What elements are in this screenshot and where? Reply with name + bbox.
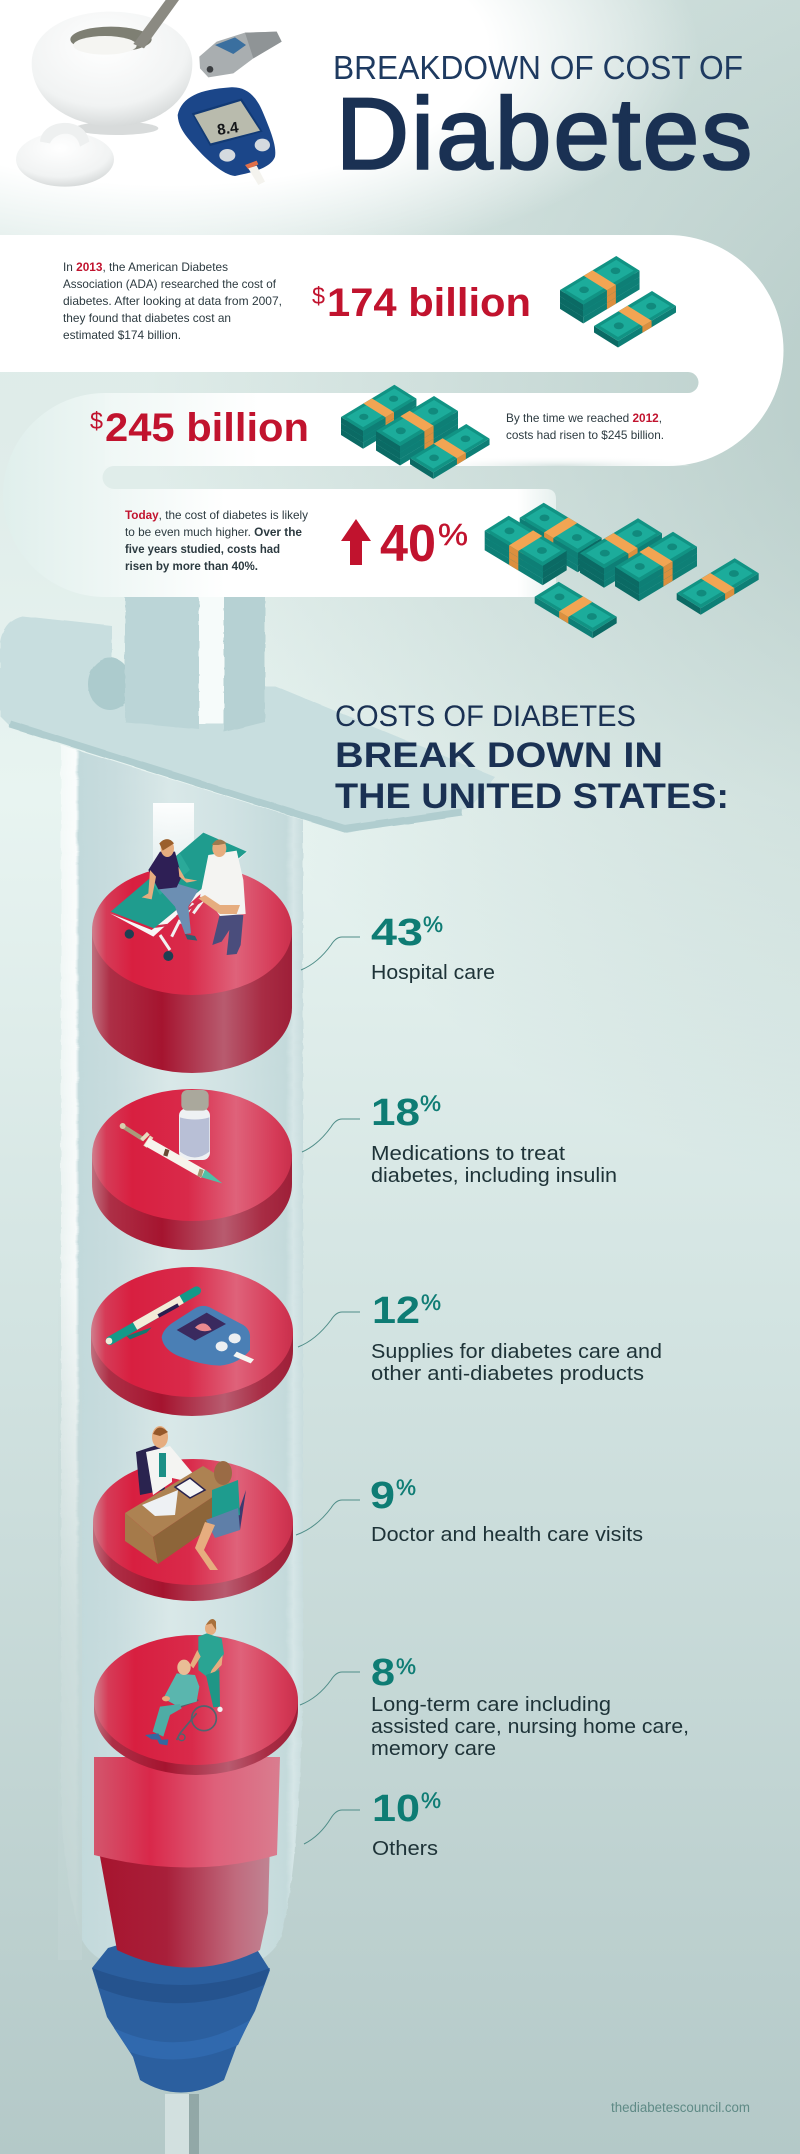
text: today: five years studied, costs had [125, 542, 280, 556]
figure: 40 percent [380, 515, 468, 573]
photo: blood glucose meter: 8.4 [216, 119, 240, 139]
stat: 18% medications: 18 [371, 1092, 420, 1134]
photo: sugar bowl and glucose meters [16, 0, 282, 187]
text: today [125, 508, 308, 573]
panel: 2013 cost [63, 256, 676, 348]
title line: breakdown of cost of: BREAKDOWN OF COST OF [333, 49, 743, 86]
section heading [335, 700, 729, 816]
disc: supplies 12% [91, 1267, 293, 1416]
stat: 8% long-term care: memory care [371, 1738, 496, 1760]
stat: 18% medications: diabetes, including insulin [371, 1165, 617, 1187]
stat: 10% others: % [421, 1788, 441, 1813]
text: 2013 study [63, 260, 282, 342]
stopper: blue plunger tip [92, 1936, 270, 2092]
vial [179, 1090, 210, 1160]
photo: sugar bowl lid [16, 123, 114, 187]
disc: long-term care 8% [94, 1619, 298, 1775]
illustration: insulin vial and syringe [120, 1090, 222, 1183]
glucose meter [162, 1306, 254, 1366]
doctor [136, 1426, 197, 1495]
illustration: patient on gurney with doctor [110, 833, 248, 961]
ribbon: upper and middle bands [0, 235, 784, 466]
stat: 10% others: Others [372, 1838, 438, 1860]
stat: 10% others: 10 [372, 1788, 420, 1830]
syringe: flange and plunger stem [0, 597, 495, 833]
connector lines [296, 937, 360, 1844]
stat: 43% hospital care: 43 [371, 912, 423, 954]
stat: 12% supplies: % [421, 1290, 441, 1315]
stat: 43% hospital care: Hospital care [371, 962, 495, 984]
section heading: COSTS OF DIABETES [335, 700, 636, 733]
stat: 8% long-term care: assisted care, nursing home care, [371, 1716, 689, 1738]
wheelchair [163, 1700, 216, 1741]
text: today: Today, the cost of diabetes is likely [125, 508, 308, 522]
stat: 8% long-term care: % [396, 1654, 416, 1679]
text: 2012 rise: costs had risen to $245 billion. [506, 428, 664, 442]
stat: 9% doctor visits: % [396, 1475, 416, 1500]
disc: doctor visits 9% [93, 1426, 293, 1601]
stat: 8% long-term care [371, 1652, 689, 1760]
text: 2012 rise: By the time we reached 2012, [506, 411, 662, 425]
laptop [142, 1490, 178, 1516]
text: 2013 study: estimated $174 billion. [63, 328, 181, 342]
figure: $174 billion: 174 billion [327, 281, 531, 325]
needle [165, 2094, 199, 2154]
doctor [198, 840, 246, 955]
stat: 9% doctor visits: 9 [370, 1475, 395, 1517]
gurney [110, 833, 248, 961]
text: today: risen by more than 40%. [125, 559, 258, 573]
nurse [190, 1619, 224, 1712]
disc: medications 18% [92, 1089, 292, 1250]
panel: 2012 cost [90, 385, 664, 479]
insulin pen [106, 1291, 197, 1344]
photo: sugar bowl [32, 0, 192, 135]
stat: 12% supplies: 12 [372, 1290, 420, 1332]
stat: 12% supplies: Supplies for diabetes care and [371, 1341, 662, 1363]
icon: money stacks [560, 256, 676, 348]
figure: 40 percent: 40 [380, 515, 436, 573]
stat: 18% medications: % [420, 1091, 441, 1116]
section heading: BREAK DOWN IN [335, 736, 663, 775]
stat: 12% supplies [371, 1290, 662, 1385]
wheelchair patient [145, 1660, 199, 1745]
photo: lancing device [199, 32, 282, 77]
stat: 18% medications [371, 1091, 617, 1187]
text: 2013 study: diabetes. After looking at data from 2007, [63, 294, 282, 308]
text: 2013 study: they found that diabetes cost an [63, 311, 231, 325]
stat: 9% doctor visits: Doctor and health care visits [371, 1524, 643, 1546]
arrow: up [341, 519, 371, 565]
stat: 43% hospital care [371, 912, 495, 984]
liquid: others 10% [94, 1757, 280, 1968]
stat: 43% hospital care: % [423, 912, 443, 937]
icon: money stacks [485, 503, 759, 638]
stat: 10% others [372, 1788, 441, 1860]
text: 2012 rise [506, 411, 664, 442]
figure: 40 percent: % [438, 517, 468, 552]
syringe: barrel [61, 745, 303, 1978]
white S-shaped ribbon [0, 235, 784, 597]
clipboard [175, 1478, 205, 1498]
text: 2013 study: In 2013, the American Diabetes [63, 260, 228, 274]
figure: $174 billion: $ [312, 283, 325, 310]
figure: $245 billion: $ [90, 408, 103, 435]
patient [142, 839, 198, 941]
syringe [120, 1123, 222, 1183]
stat: 12% supplies: other anti-diabetes products [371, 1363, 644, 1385]
stat: 8% long-term care: Long-term care including [371, 1694, 611, 1716]
syringe [0, 597, 495, 1978]
section heading: THE UNITED STATES: [335, 777, 729, 816]
text: today: to be even much higher. Over the [125, 525, 302, 539]
text: 2013 study: Association (ADA) researched the cost of [63, 277, 277, 291]
figure: $245 billion: 245 billion [105, 406, 309, 450]
stat: 8% long-term care: 8 [371, 1652, 395, 1694]
footer: source url: thediabetescouncil.com [611, 2100, 750, 2115]
disc: hospital care 43% [92, 833, 292, 1073]
title word: diabetes: Diabetes [336, 78, 752, 190]
illustration: nurse and wheelchair patient [145, 1619, 224, 1745]
illustration: insulin pen and meter [106, 1291, 254, 1366]
patient [195, 1461, 246, 1570]
panel: today 40 percent [125, 503, 759, 638]
stat: 9% doctor visits [370, 1475, 643, 1546]
stat: 18% medications: Medications to treat [371, 1143, 565, 1165]
title [333, 49, 752, 190]
photo: blood glucose meter [178, 87, 275, 185]
icon: money stacks [341, 385, 490, 479]
desk [125, 1466, 232, 1564]
illustration: doctor at desk with patient [125, 1426, 246, 1570]
ribbon: lower band [3, 393, 556, 597]
